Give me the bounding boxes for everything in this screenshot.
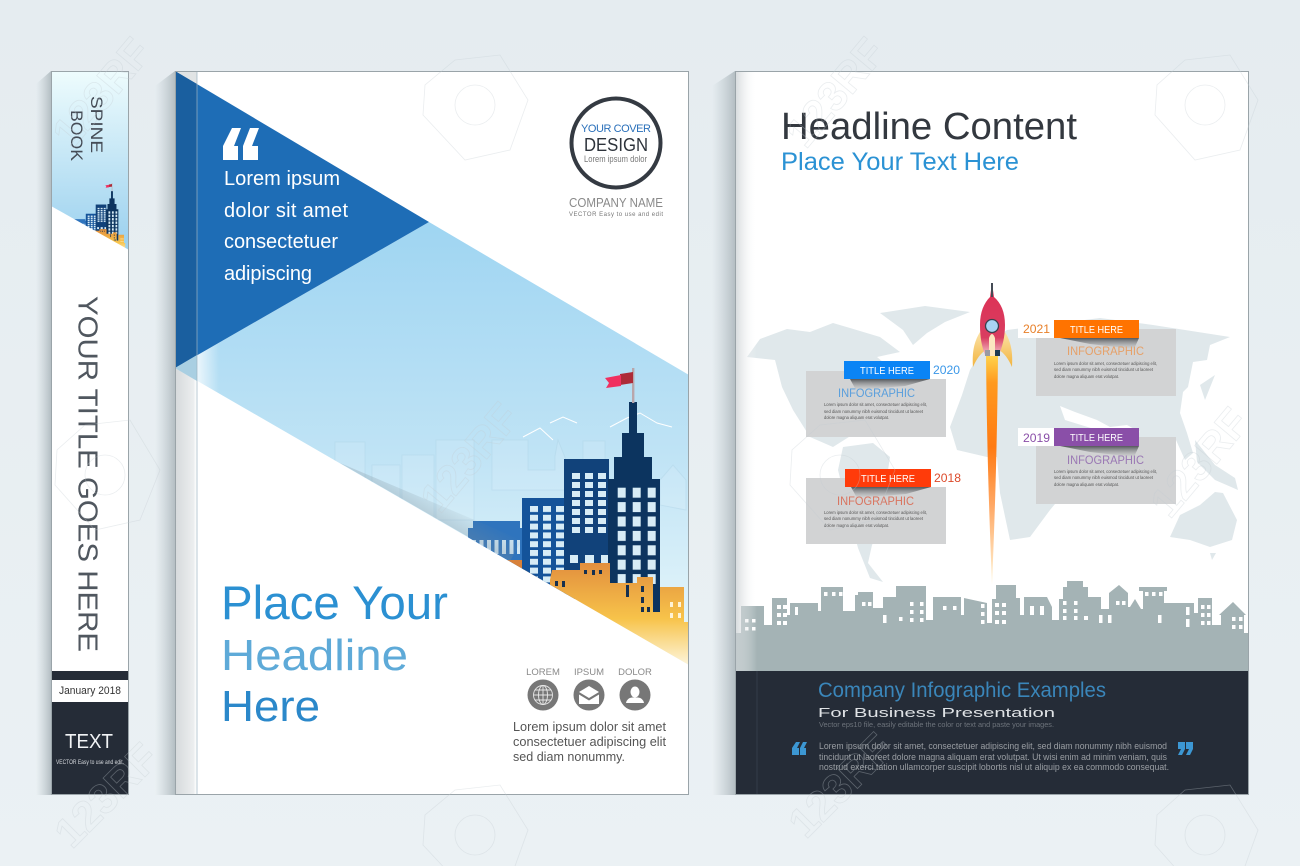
watermark: 123RF (1141, 399, 1258, 526)
panel: 2020: TITLE HERE (860, 365, 914, 377)
spine date: January 2018 (59, 685, 121, 697)
logo badge: Lorem ipsum dolor (584, 154, 647, 164)
panel: back cover (712, 71, 1249, 795)
contact icons: LOREM (526, 667, 560, 678)
panel: 2020: INFOGRAPHIC (838, 386, 915, 400)
panel: book spine (36, 71, 129, 795)
panel: 2019: INFOGRAPHIC (1067, 453, 1144, 467)
spine footer (51, 702, 129, 795)
edge shadow (340, 463, 522, 561)
sky band (175, 222, 689, 665)
spine footer: TEXT (65, 731, 113, 753)
headline (221, 576, 448, 731)
icon: globe (528, 680, 558, 710)
spine title: YOUR TITLE GOES HERE (72, 296, 104, 652)
panel: 2020: sed diam nonummy nibh euismod tincidunt ut laoreet (824, 409, 924, 414)
icon: right quote (1178, 742, 1193, 755)
panel: 2019: 2019 (1023, 431, 1050, 445)
panel: 2021 (1018, 320, 1176, 396)
panel: front cover (155, 71, 689, 795)
world map (747, 306, 1238, 582)
spine fold (175, 71, 197, 795)
footer subheading: For Business Presentation (818, 705, 1055, 720)
logo badge: DESIGN (584, 134, 648, 155)
back headline: Headline Content (781, 106, 1077, 148)
contact icons (526, 667, 652, 710)
contact icons: DOLOR (618, 667, 652, 678)
panel: 2020 (806, 361, 962, 437)
company name: COMPANY NAME (569, 195, 663, 210)
contact text: consectetuer adipiscing elit (513, 735, 667, 749)
contact icons: IPSUM (574, 667, 604, 678)
icon: left quote (792, 742, 807, 755)
footer note: Vector eps10 file, easily editable the color or text and paste your images. (819, 720, 1054, 729)
headline: Headline (221, 631, 408, 680)
footer body text: Lorem ipsum dolor sit amet, consectetuer adipiscing elit, sed diam nonummy nibh euismod (819, 741, 1167, 752)
panel: 2021: INFOGRAPHIC (1067, 344, 1144, 358)
logo badge: YOUR COVER (581, 123, 651, 135)
panel: 2019: sed diam nonummy nibh euismod tincidunt ut laoreet (1054, 475, 1154, 480)
skyline (735, 581, 1249, 671)
fold shading (735, 71, 757, 795)
panel: 2018: 2018 (934, 471, 961, 485)
clouds (523, 413, 672, 440)
panel: 2020: Lorem ipsum dolor sit amet, consectetuer adipiscing elit, (824, 402, 927, 407)
footer body text: nostrud exerci tation ullamcorper suscipit lobortis nisl ut aliquip ex ea commodo consequat. (819, 762, 1169, 773)
ghost skyline (334, 458, 686, 520)
company name (569, 195, 663, 218)
icon: person (620, 680, 650, 710)
panel: 2019: TITLE HERE (1070, 432, 1123, 444)
panel: 2020: 2020 (933, 363, 960, 377)
spine label: BOOK (67, 110, 86, 162)
city illustration (468, 368, 689, 680)
panel: 2021: dolore magna aliquam erat volutpat. (1054, 374, 1119, 379)
quote text (224, 168, 348, 285)
spine dark band (51, 671, 129, 680)
footer body text (819, 741, 1169, 773)
spine label: SPINE (87, 96, 106, 153)
watermark: 123RF (779, 724, 902, 846)
back subheadline: Place Your Text Here (781, 148, 1019, 176)
footer body text: tincidunt ut laoreet dolore magna aliquam erat volutpat. Ut wisi enim ad minim veniam, quis (819, 752, 1167, 763)
panel: 2018: TITLE HERE (861, 473, 915, 485)
panel: 2021: Lorem ipsum dolor sit amet, consectetuer adipiscing elit, (1054, 361, 1157, 366)
contact text: Lorem ipsum dolor sit amet (513, 720, 667, 734)
panel: 2021: sed diam nonummy nibh euismod tincidunt ut laoreet (1054, 367, 1154, 372)
panel: 2020: dolore magna aliquam erat volutpat. (824, 415, 889, 420)
blue triangle (175, 71, 429, 368)
contact text: sed diam nonummy. (513, 750, 625, 764)
spine footer: VECTOR Easy to use and edit. (56, 759, 124, 766)
icon: rocket (973, 283, 1012, 585)
contact text (513, 720, 667, 764)
panel: 2018: Lorem ipsum dolor sit amet, consectetuer adipiscing elit, (824, 510, 927, 515)
fold highlight (197, 71, 219, 795)
company name: VECTOR Easy to use and edit (569, 212, 663, 218)
panel: 2018: sed diam nonummy nibh euismod tincidunt ut laoreet (824, 516, 924, 521)
panel: 2018: dolore magna aliquam erat volutpat. (824, 523, 889, 528)
headline: Place Your (221, 576, 448, 629)
panel: 2019: dolore magna aliquam erat volutpat. (1054, 482, 1119, 487)
watermark: 123RF (43, 29, 160, 156)
panel: 2021: 2021 (1023, 322, 1050, 336)
icon: quotation marks (223, 128, 259, 160)
logo badge (572, 98, 660, 188)
watermark: 123RF (411, 394, 528, 521)
footer heading: Company Infographic Examples (818, 679, 1106, 702)
quote text: dolor sit amet (224, 200, 348, 222)
quote text: adipiscing (224, 263, 312, 285)
footer band (735, 671, 1249, 795)
quote text: Lorem ipsum (224, 168, 340, 190)
headline: Here (221, 682, 320, 731)
watermark: 123RF (777, 29, 894, 156)
watermark: 123RF (45, 734, 168, 856)
icon: envelope (574, 680, 604, 710)
panel: 2018: INFOGRAPHIC (837, 494, 914, 508)
panel: 2021: TITLE HERE (1070, 324, 1123, 336)
quote text: consectetuer (224, 231, 338, 253)
panel: 2019: Lorem ipsum dolor sit amet, consectetuer adipiscing elit, (1054, 469, 1157, 474)
panel: 2018 (806, 469, 962, 544)
spine label (67, 96, 106, 162)
panel: 2019 (1018, 428, 1176, 504)
spine sky artwork (51, 71, 129, 262)
